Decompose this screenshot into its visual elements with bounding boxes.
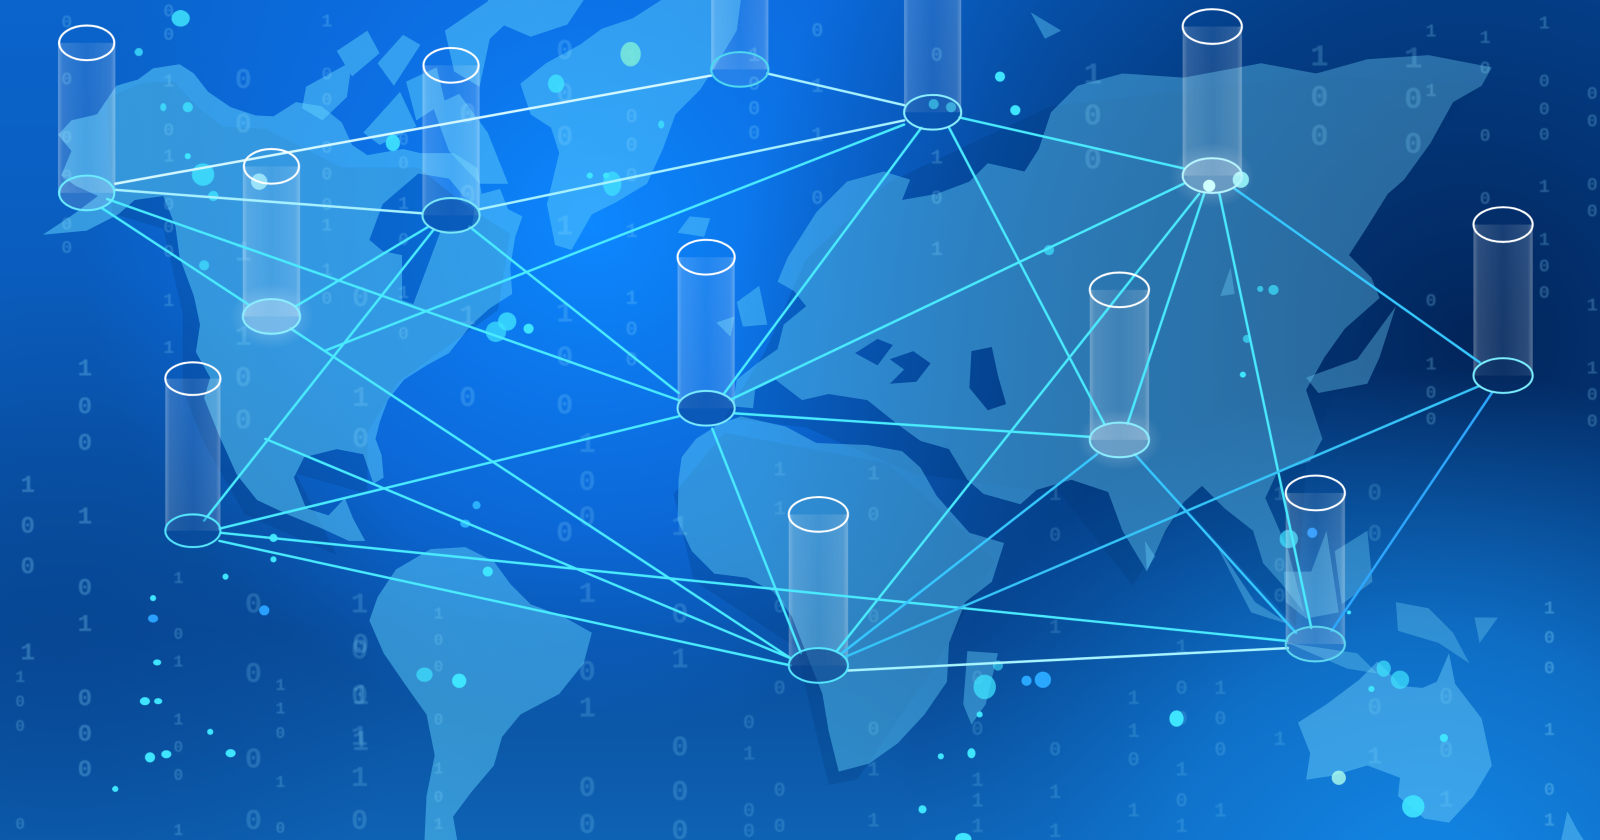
binary digits: 1011001 — [173, 569, 183, 840]
cylinder body: Africa — [789, 514, 848, 665]
digits: top left — [61, 1, 409, 359]
cylinder body: Hudson Bay — [422, 65, 480, 215]
cylinder body: Japan — [1473, 225, 1533, 376]
node: Mexico — [165, 362, 220, 547]
islands — [302, 0, 1498, 725]
binary digits: 0001 — [1367, 481, 1382, 771]
digits: bottom left — [20, 357, 92, 785]
digits: bottom centre: 100110 — [351, 588, 368, 838]
digits: bottom centre: 10010100 — [579, 428, 596, 840]
binary digits: 1101 — [1128, 688, 1140, 824]
node: Russia central — [1169, 9, 1255, 208]
digits: top centre: 0010 — [459, 98, 476, 415]
binary digits: 0101 — [931, 45, 943, 262]
digits: top left: 0010100011 — [163, 1, 174, 359]
digits: bottom centre: 101000 — [671, 511, 689, 840]
digits: bottom left: 100101000 — [78, 357, 92, 785]
digits: bottom centre: 0000 — [245, 588, 262, 838]
digits: top centre: 010011 — [352, 282, 369, 759]
digits: top right: 100 — [1084, 60, 1102, 178]
node: Alaska — [59, 26, 114, 210]
binary digits: 100101 — [1176, 637, 1188, 839]
node: western Canada — [229, 149, 314, 349]
binary digits: 100011 — [867, 464, 880, 834]
digits: bottom right: 100101 — [1544, 598, 1555, 832]
binary digits: 10001100 — [1539, 14, 1550, 304]
node: Indonesia — [1286, 476, 1345, 661]
cylinder body: western Canada — [243, 166, 300, 316]
digits: top left: 100000110 — [321, 12, 332, 310]
cylinder body: Indonesia — [1286, 493, 1345, 644]
binary digits: 1001 — [1273, 484, 1286, 752]
binary digits: 1000101 — [434, 605, 444, 834]
binary digits: 11010 — [276, 676, 286, 838]
cylinder body: Russia central — [1183, 27, 1242, 176]
cylinder body: Mexico — [165, 379, 220, 531]
node: Russia west — [904, 95, 961, 130]
node: Spain — [678, 240, 735, 426]
binary digits: 10001100 — [626, 47, 638, 372]
Tasmania — [1561, 811, 1584, 840]
node: Africa — [789, 497, 848, 683]
Australia — [1298, 653, 1492, 823]
node: India — [1077, 273, 1162, 471]
digits: top centre: 001100 — [235, 64, 252, 438]
digits: top right: 100 — [1404, 43, 1422, 163]
binary digits: 101011 — [1049, 484, 1061, 840]
binary digits: 001 — [1439, 685, 1453, 814]
digits: bottom left: 1001 — [20, 473, 35, 667]
cylinder body: India — [1090, 290, 1149, 440]
cylinder bodies — [58, 0, 1533, 665]
binary digits: 00111 — [971, 668, 984, 839]
digits: top right — [1084, 41, 1422, 178]
cylinder body: Russia west — [904, 0, 961, 112]
binary digits: 1000 — [1480, 28, 1491, 210]
digits: bottom centre — [245, 428, 689, 840]
cylinder end caps — [59, 9, 1533, 683]
binary digits: 1000 — [748, 45, 760, 146]
cylinder body: Greenland — [711, 0, 768, 69]
node: Hudson Bay — [422, 48, 480, 233]
binary digits: 0110 — [811, 21, 823, 211]
digits: top centre: 00011000 — [556, 35, 573, 550]
node: Greenland — [711, 52, 768, 87]
digits: top right: 100 — [1310, 41, 1329, 155]
cylinder body: Spain — [678, 257, 735, 408]
binary digits: 110000 — [773, 460, 786, 839]
binary digits: 1001 — [1214, 678, 1227, 824]
network links — [102, 73, 1492, 671]
cylinder body: Alaska — [58, 43, 115, 193]
digits: top left: 001010 — [398, 130, 409, 345]
binary digits: 110100 — [1426, 22, 1437, 431]
digits: top centre — [235, 35, 573, 759]
binary digits: 1000 — [15, 668, 25, 834]
binary digits: 00001100 — [1587, 84, 1598, 433]
node: Japan — [1473, 207, 1533, 393]
digits: top left: 000000 — [61, 13, 72, 259]
